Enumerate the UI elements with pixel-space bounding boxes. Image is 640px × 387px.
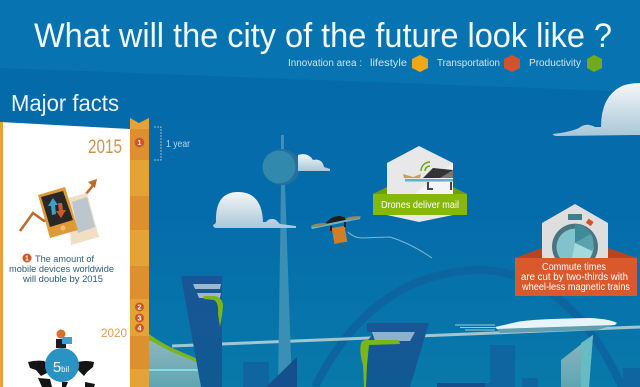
building: distant blocks bbox=[243, 345, 640, 387]
callout: commute times bbox=[515, 204, 637, 296]
text: mobile devices fact: 1 bbox=[25, 256, 29, 262]
icon: transportation hexagon bbox=[504, 55, 520, 72]
cloud: behind tower bbox=[298, 154, 330, 171]
icon: mobile growth bbox=[20, 179, 99, 245]
year: 2015: 2015 bbox=[88, 137, 122, 158]
text: mobile devices fact: mobile devices worldwide bbox=[9, 264, 114, 275]
building: low foreground bbox=[437, 383, 485, 387]
rail line bbox=[172, 327, 640, 346]
cloud: left bbox=[213, 192, 296, 228]
text: mobile devices fact: will double by 2015 bbox=[22, 274, 103, 285]
badge 2 bbox=[135, 302, 144, 312]
legend: innovation areas: Innovation area : bbox=[288, 58, 362, 69]
icon: stopwatch bbox=[552, 214, 598, 258]
text: mobile devices fact: The amount of bbox=[35, 254, 94, 265]
legend: innovation areas: Transportation bbox=[437, 58, 500, 69]
train bbox=[455, 318, 617, 333]
icon: world map with 5bil globe: 5bil bbox=[53, 359, 69, 376]
title: What will the city of the future look like ? bbox=[34, 17, 612, 55]
badge 4: 4 bbox=[138, 326, 142, 332]
callout: commute times: Commute times bbox=[542, 262, 606, 273]
legend: innovation areas: lifestyle bbox=[370, 58, 407, 69]
icon: productivity hexagon bbox=[587, 55, 602, 72]
arc: bridge bbox=[315, 270, 622, 387]
year: 2020: 2020 bbox=[101, 326, 127, 340]
cloud: top right bbox=[553, 83, 640, 136]
callout: drones deliver mail bbox=[373, 146, 467, 222]
building: left teal block with greenery bbox=[149, 334, 201, 387]
panel: major facts bbox=[0, 122, 130, 387]
badge 3: 3 bbox=[138, 316, 142, 322]
label banner bbox=[515, 258, 637, 296]
heading: major facts: Major facts bbox=[11, 90, 119, 116]
icon: world map with 5bil globe bbox=[28, 330, 95, 387]
tower bbox=[262, 135, 300, 387]
callout: commute times: are cut by two-thirds with bbox=[521, 272, 628, 283]
icon: number 1 badge bbox=[22, 254, 32, 262]
one year bracket: 1 year bbox=[166, 138, 190, 150]
badge 1: 1 bbox=[138, 140, 142, 147]
building: right glass tower bbox=[561, 335, 593, 387]
timeline ribbon bbox=[130, 118, 149, 387]
text: mobile devices fact bbox=[9, 254, 114, 285]
icon: lifestyle hexagon bbox=[412, 55, 428, 72]
callout: drones deliver mail: Drones deliver mail bbox=[381, 199, 459, 211]
icon: drone bbox=[403, 162, 453, 190]
drone with package bbox=[311, 215, 432, 258]
tower base wedge bbox=[266, 357, 297, 387]
legend: innovation areas bbox=[288, 55, 602, 72]
building: left dark tower bbox=[181, 276, 223, 387]
badge 2: 2 bbox=[138, 304, 142, 312]
one year bracket bbox=[154, 127, 190, 160]
legend: innovation areas: Productivity bbox=[529, 58, 581, 69]
label banner bbox=[373, 194, 467, 215]
badge 3 bbox=[135, 314, 144, 322]
badge 1 bbox=[135, 138, 144, 147]
building: centre dark tower bbox=[360, 323, 429, 387]
badge 4 bbox=[135, 324, 144, 332]
callout: commute times: wheel-less magnetic trains bbox=[521, 282, 630, 293]
